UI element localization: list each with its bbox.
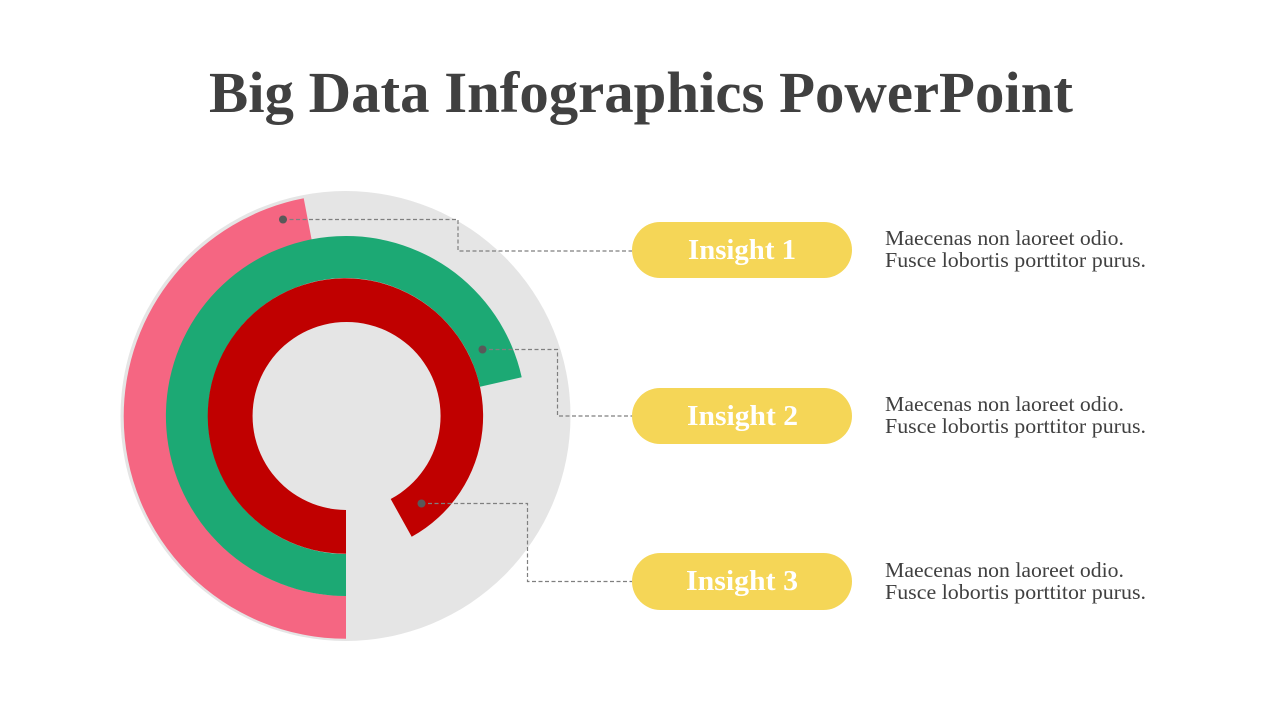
text: insight 1 description: Fusce lobortis porttitor purus.: [885, 248, 1146, 272]
text: insight 1 description: [885, 226, 1146, 272]
chart: concentric radial progress rings: [120, 191, 570, 641]
ring: insight 1 (pink): [124, 198, 346, 639]
text: insight 3 description: [885, 558, 1146, 604]
pill: insight 3: [632, 553, 852, 610]
text: insight 2 description: Maecenas non laoreet odio.: [885, 392, 1124, 416]
pill: insight 1: Insight 1: [688, 234, 796, 266]
connector: insight 1: [279, 216, 632, 251]
text: insight 2 description: [885, 392, 1146, 438]
title: Big Data Infographics PowerPoint: [209, 60, 1074, 125]
connector: insight 3: [418, 500, 632, 582]
text: insight 3 description: Fusce lobortis porttitor purus.: [885, 580, 1146, 604]
pill: insight 1: [632, 222, 852, 278]
pill: insight 2: Insight 2: [687, 400, 798, 432]
connector: insight 2: [478, 346, 632, 416]
chart background disc: [120, 191, 570, 641]
text: insight 1 description: Maecenas non laoreet odio.: [885, 226, 1124, 250]
text: insight 2 description: Fusce lobortis porttitor purus.: [885, 414, 1146, 438]
ring: insight 2 (green): [166, 236, 522, 596]
text: insight 3 description: Maecenas non laoreet odio.: [885, 558, 1124, 582]
pill: insight 2: [632, 388, 852, 444]
pill: insight 3: Insight 3: [686, 565, 798, 597]
ring: insight 3 (red): [208, 278, 483, 554]
